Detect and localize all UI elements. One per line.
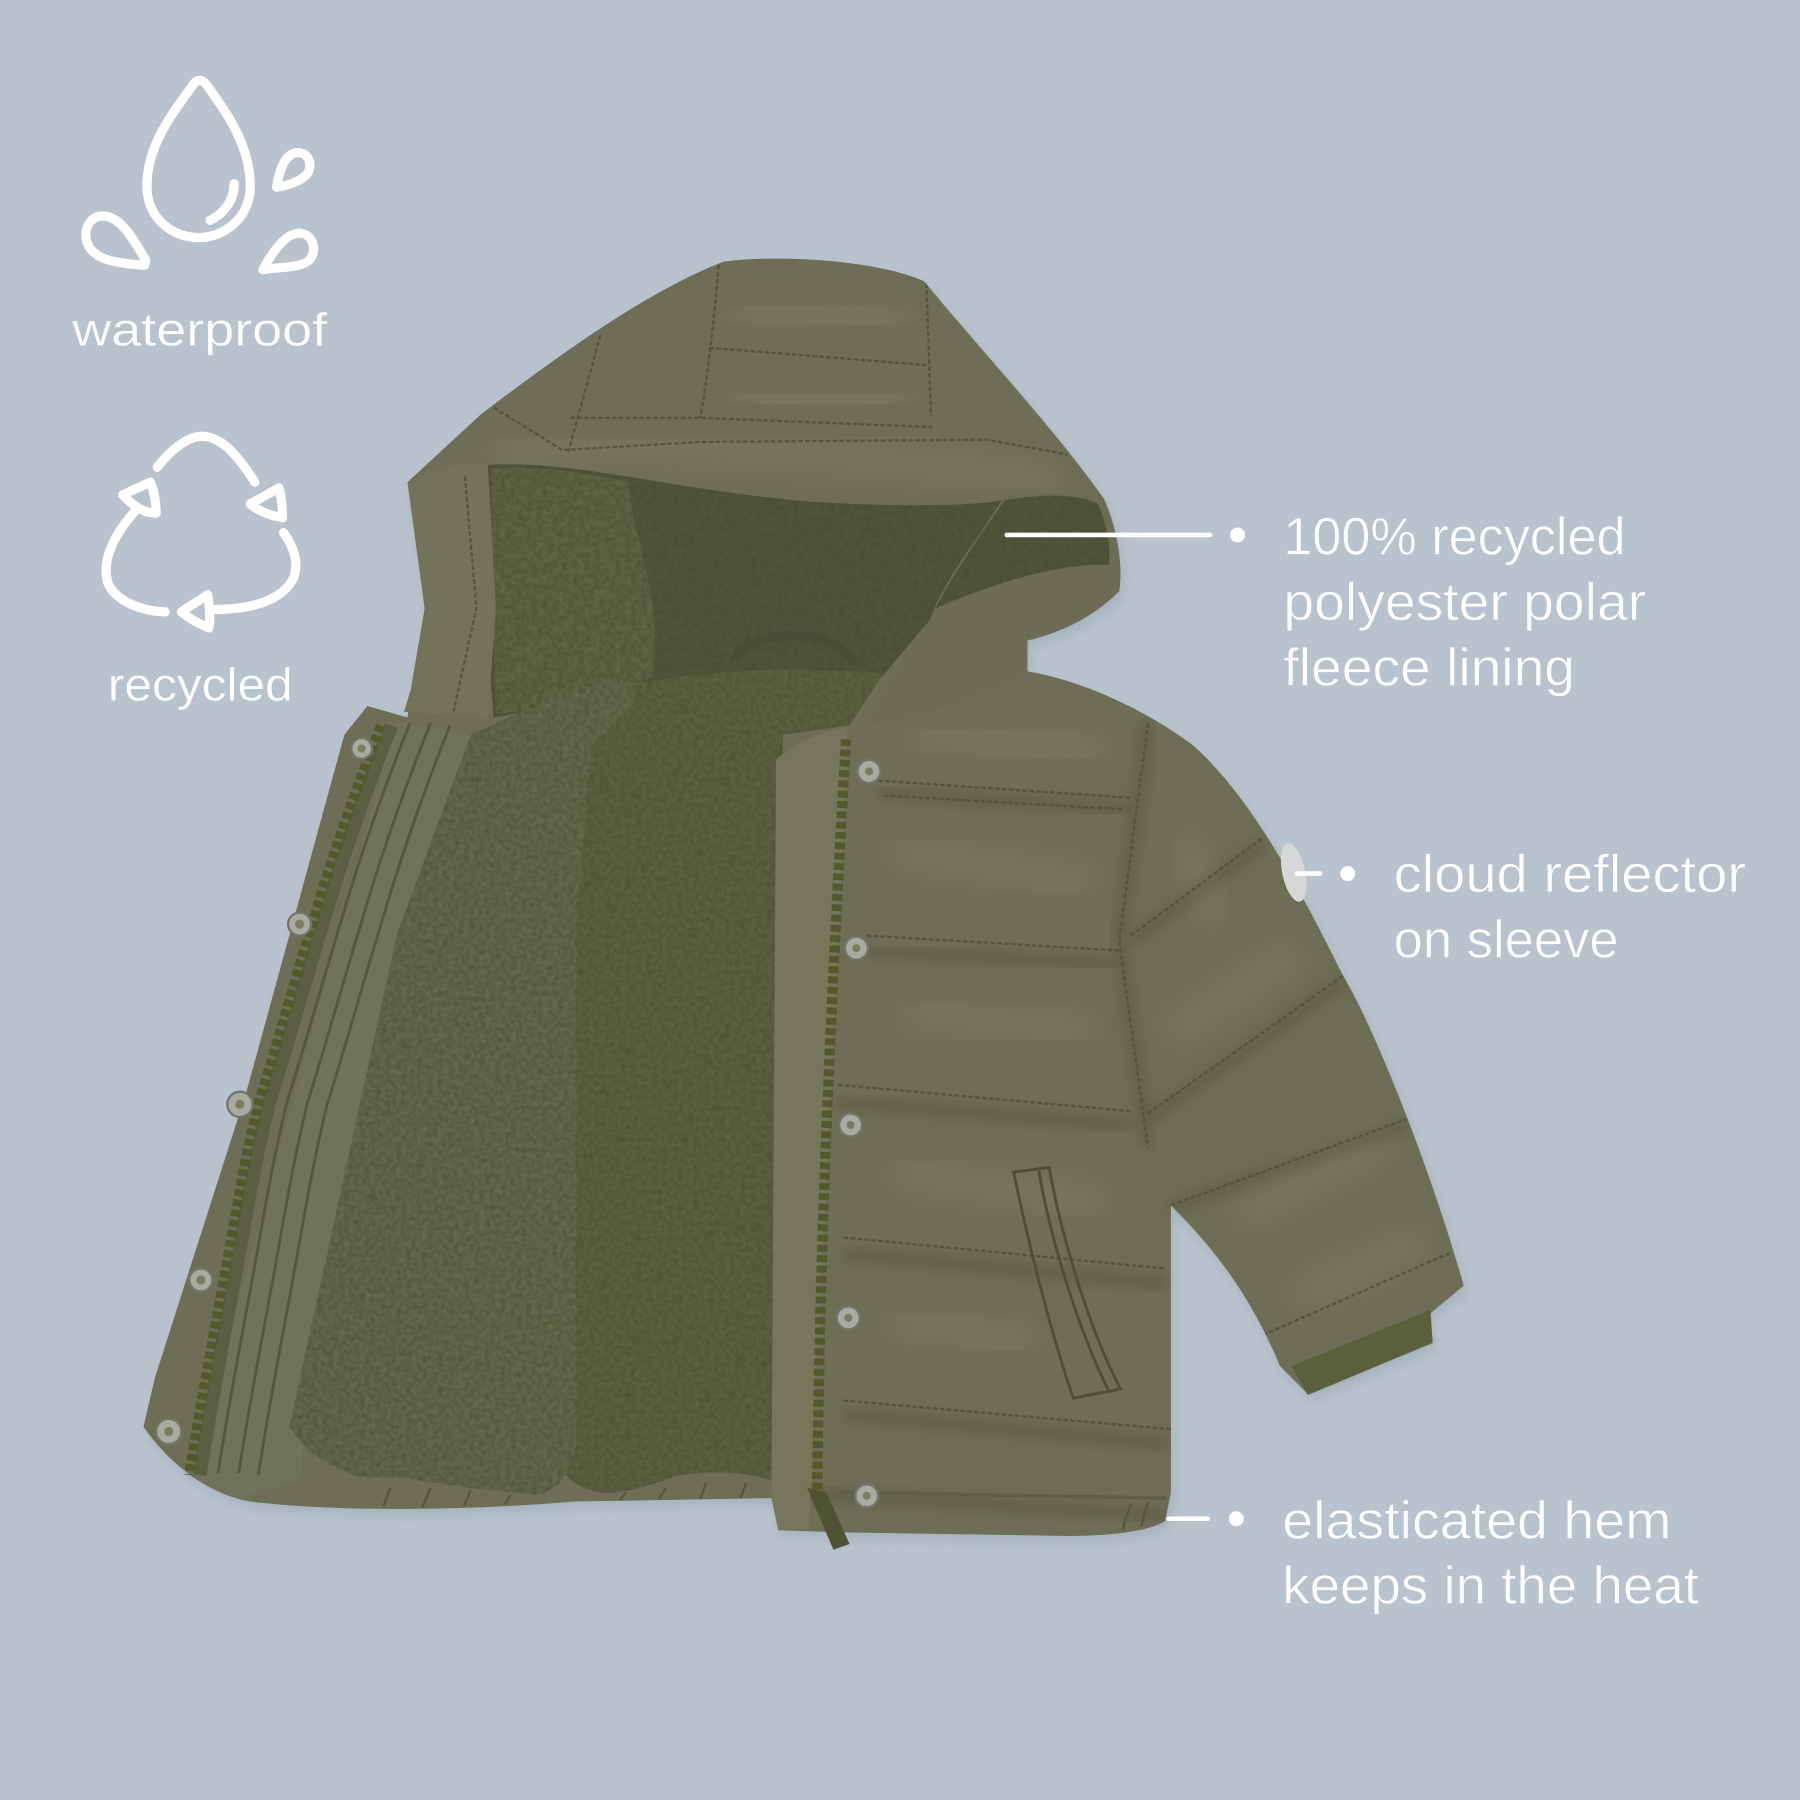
callout: fleece lining	[1004, 507, 1646, 697]
soft ground shadow	[147, 265, 1467, 1543]
pocket	[1014, 1167, 1120, 1398]
right front placket	[771, 728, 847, 1530]
hood quilting seams	[494, 265, 1083, 455]
left zipper	[189, 726, 381, 1475]
metal snap buttons	[156, 738, 880, 1507]
label: recycled: recycled	[108, 658, 293, 710]
back lining fleece	[562, 670, 884, 1493]
front quilting stitches	[838, 723, 1451, 1498]
hood fleece lit left	[491, 468, 655, 714]
callout: fleece lining: polyester polar	[1283, 573, 1646, 632]
callout: elasticated hem	[1166, 1491, 1699, 1616]
left lining fleece	[289, 679, 635, 1495]
jacket shell silhouette	[143, 259, 1464, 1536]
icon: waterproof droplets	[86, 80, 314, 270]
zipper pull	[807, 1488, 849, 1550]
hood flap left	[404, 464, 496, 717]
shell shading	[494, 310, 1423, 1515]
sleeve cuff	[1291, 1310, 1433, 1395]
cloud reflector	[1276, 841, 1311, 904]
hood interior fleece	[482, 464, 1004, 717]
left placket stitching	[189, 721, 471, 1499]
icon: recycling arrows	[106, 436, 296, 628]
snap centres	[164, 744, 873, 1500]
jacket photo illustration	[143, 259, 1467, 1550]
hood fleece right shadow	[936, 496, 1110, 608]
hem gathers	[383, 1483, 1148, 1529]
callout: elasticated hem: elasticated hem	[1282, 1491, 1671, 1550]
hanging loop	[735, 636, 855, 664]
right zipper	[817, 739, 846, 1492]
hood lapel right	[867, 494, 1120, 726]
callout: cloud reflector: on sleeve	[1394, 910, 1619, 969]
callout: cloud reflector	[1295, 845, 1746, 969]
callout: fleece lining: fleece lining	[1283, 638, 1575, 697]
callout: fleece lining: 100% recycled	[1283, 507, 1626, 566]
callout: cloud reflector: cloud reflector	[1394, 845, 1746, 904]
label: waterproof: waterproof	[71, 304, 327, 356]
callout: elasticated hem: keeps in the heat	[1282, 1557, 1699, 1616]
